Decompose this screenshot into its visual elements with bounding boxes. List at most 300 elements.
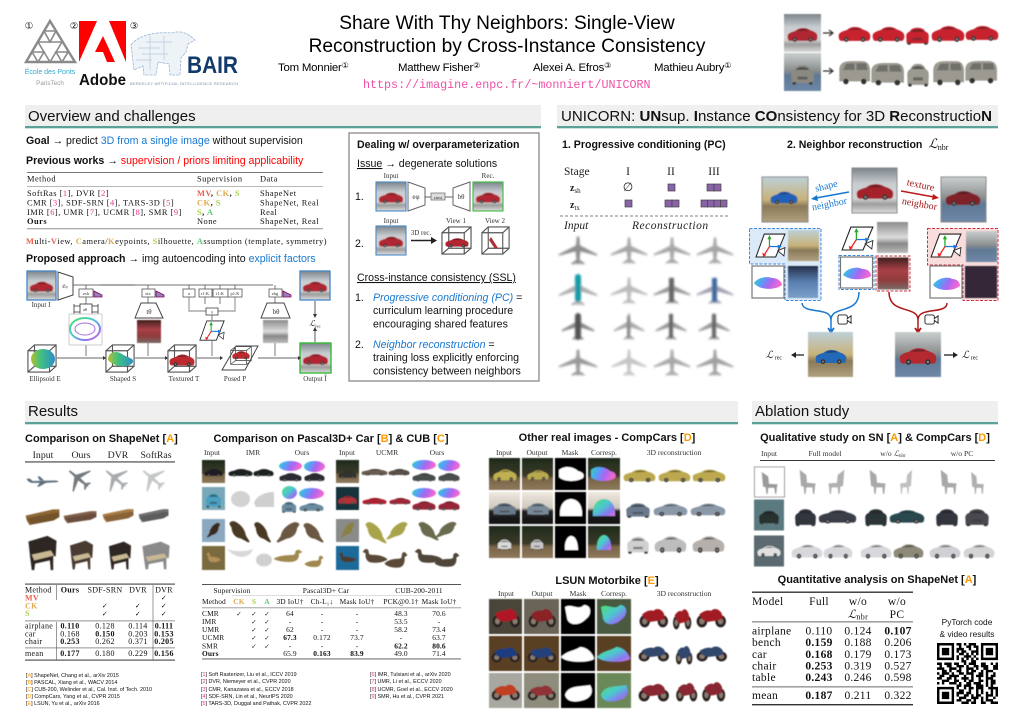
column headers bbox=[204, 448, 444, 457]
ellipsoid stage: Ellipsoid E bbox=[29, 375, 61, 383]
posed stage bbox=[222, 346, 258, 383]
table: quantitative: 0.322 bbox=[884, 690, 912, 702]
table: quantitative: 0.168 bbox=[805, 649, 833, 661]
item: progressive conditioning bbox=[355, 292, 522, 330]
table: Pascal3D and CUB metrics: 70.6 bbox=[432, 609, 446, 618]
table: Pascal3D and CUB metrics: 80.6 bbox=[432, 642, 446, 650]
texture decoder and map bbox=[135, 303, 163, 343]
table: Pascal3D and CUB metrics: ✓ bbox=[264, 610, 270, 618]
stage table: Input bbox=[563, 220, 589, 232]
table: Pascal3D and CUB metrics: 71.4 bbox=[432, 649, 446, 658]
table: ShapeNet metrics: 0.110 bbox=[60, 622, 80, 630]
stage table: z bbox=[570, 200, 574, 211]
table: Pascal3D and CUB metrics: CK bbox=[233, 597, 245, 606]
table: Pascal3D and CUB metrics: UCMR bbox=[202, 633, 224, 642]
table: quantitative: 0.179 bbox=[844, 649, 872, 661]
ellipsoid stage bbox=[28, 345, 61, 383]
logo: Adobe: Adobe bbox=[79, 72, 126, 89]
background decoder and map bbox=[261, 303, 290, 343]
table: quantitative: 0.173 bbox=[884, 649, 912, 661]
table: Pascal3D and CUB metrics: ✓ bbox=[264, 642, 270, 650]
cross-instance heading: Cross-instance consistency (SSL) bbox=[357, 272, 516, 284]
table: Pascal3D and CUB metrics: Method bbox=[202, 597, 226, 606]
table: previous methods: S, A bbox=[197, 208, 213, 217]
logo: Ecole des Ponts: ParisTech bbox=[36, 80, 64, 87]
table: ShapeNet metrics: 0.203 bbox=[128, 630, 148, 638]
subpanel: LSUN motorbike bbox=[489, 575, 727, 708]
table: ShapeNet metrics: mean bbox=[25, 649, 44, 658]
authors: ① bbox=[342, 61, 349, 70]
stage table bbox=[560, 166, 730, 232]
subpanel: Pascal3D and CUB comparison bbox=[201, 433, 461, 707]
latent connections bbox=[73, 285, 275, 356]
table: Pascal3D and CUB metrics: 73.7 bbox=[350, 633, 364, 642]
output images and losses: ℒ bbox=[766, 350, 773, 361]
table: Pascal3D and CUB metrics: - bbox=[438, 617, 441, 626]
subheading: qualitative: Qualitative study on SN [A] & CompCars [D] bbox=[760, 432, 990, 444]
stage table: Stage bbox=[564, 166, 590, 178]
references A-E: [A] ShapeNet, Chang et al., arXiv 2015 bbox=[26, 673, 119, 679]
latent code labels: zsh bbox=[83, 291, 90, 296]
arrows: shape and texture neighbors: texture bbox=[906, 177, 936, 194]
table: Pascal3D and CUB metrics: 73.4 bbox=[432, 625, 446, 634]
column headers: Input bbox=[339, 448, 356, 457]
table: ShapeNet metrics: Ours bbox=[61, 586, 79, 594]
column headers bbox=[496, 448, 702, 457]
subpanel: progressive conditioning bbox=[559, 139, 733, 376]
table: quantitative: ℒ bbox=[848, 609, 857, 621]
issue 1 autoencoder: bθ bbox=[458, 193, 465, 201]
table: quantitative: w/o bbox=[849, 596, 867, 608]
column headers: Mask bbox=[562, 448, 579, 457]
table: quantitative: PC bbox=[890, 609, 904, 621]
column headers: Input bbox=[204, 448, 221, 457]
subheading: Comparison on Pascal3D+ Car [B] & CUB [C] bbox=[213, 433, 449, 445]
latent code labels: π bbox=[211, 310, 214, 314]
references 1-5: [2] DVR, Niemeyer et al., CVPR 2020 bbox=[201, 679, 291, 685]
table: quantitative: 0.124 bbox=[844, 626, 872, 638]
table: Pascal3D and CUB metrics: ✓ bbox=[264, 634, 270, 642]
subpanel: ShapeNet comparison bbox=[25, 433, 178, 707]
latent code labels: zbg bbox=[272, 291, 279, 296]
table: Pascal3D and CUB metrics: - bbox=[321, 642, 324, 650]
table: previous methods: Ours bbox=[27, 217, 47, 226]
table: Pascal3D and CUB metrics: CMR bbox=[202, 609, 219, 618]
references A-E bbox=[26, 673, 152, 707]
left method outputs bbox=[227, 461, 325, 567]
background decoder and map: bθ bbox=[273, 308, 280, 316]
column headers: Ours bbox=[430, 448, 444, 457]
column headers: DVR bbox=[108, 450, 129, 461]
table: Pascal3D and CUB metrics: 62.2 bbox=[394, 642, 408, 650]
latent code labels: aθ bbox=[83, 307, 87, 312]
table: Pascal3D and CUB metrics: - bbox=[356, 609, 359, 618]
issue 1 autoencoder: 1. bbox=[355, 191, 364, 203]
output images and losses: ℒ bbox=[962, 350, 969, 361]
authors: Tom Monnier bbox=[278, 62, 342, 74]
column headers: Full model bbox=[808, 449, 842, 458]
logo: Adobe bbox=[70, 21, 126, 89]
table: quantitative: nbr bbox=[857, 612, 868, 622]
table: Pascal3D and CUB metrics: 0.172 bbox=[313, 633, 331, 642]
table: Pascal3D and CUB metrics: - bbox=[356, 642, 359, 650]
object comparison grid bbox=[26, 461, 171, 570]
column headers: w/o PC bbox=[951, 449, 973, 458]
logo: Ecole des Ponts bbox=[25, 21, 76, 87]
column headers: Ours bbox=[71, 450, 91, 461]
latent code labels bbox=[83, 291, 279, 314]
table: ShapeNet metrics: ✓ bbox=[102, 610, 108, 618]
table: ShapeNet metrics: ✓ bbox=[161, 594, 167, 602]
input image: Input I bbox=[32, 301, 51, 309]
heading: ablation: Ablation study bbox=[755, 403, 850, 420]
logo: BAIR bear: ③ bbox=[130, 21, 139, 32]
logo: BAIR bear: BAIR bbox=[187, 52, 238, 79]
column headers: UCMR bbox=[376, 448, 399, 457]
table: Pascal3D and CUB metrics: ✓ bbox=[251, 642, 257, 650]
panel: overview and challenges bbox=[25, 105, 541, 383]
table: ShapeNet metrics: ✓ bbox=[135, 610, 141, 618]
table: previous methods: ShapeNet bbox=[260, 189, 297, 198]
table: Pascal3D and CUB metrics: 63.7 bbox=[432, 633, 446, 642]
table: Pascal3D and CUB metrics: PCK@0.1† bbox=[383, 597, 419, 606]
input images bbox=[202, 460, 359, 570]
references 1-5: [4] SDF-SRN, Lin et al., NeurIPS 2020 bbox=[201, 694, 293, 700]
latent code labels: ztx bbox=[145, 291, 151, 296]
table: Pascal3D and CUB metrics: IMR bbox=[202, 617, 216, 626]
table: Pascal3D and CUB metrics: ✓ bbox=[236, 610, 242, 618]
authors: ② bbox=[473, 61, 480, 70]
column headers: Ours bbox=[295, 448, 309, 457]
table: ShapeNet metrics: 0.253 bbox=[60, 637, 80, 646]
red neighbor factors bbox=[928, 228, 998, 300]
heading: UNICORN: UNICORN: UNsup. Instance COnsistency for 3D ReconstructioN bbox=[561, 108, 992, 125]
issue 1 autoencoder: zinst bbox=[434, 195, 443, 200]
table: quantitative: Model bbox=[752, 596, 784, 608]
item: progressive conditioning: curriculum learning procedure bbox=[373, 305, 513, 317]
arrows: shape and texture neighbors bbox=[811, 177, 939, 213]
table: Pascal3D and CUB metrics: - bbox=[400, 633, 403, 642]
column headers: Input bbox=[496, 448, 513, 457]
authors: Matthew Fisher bbox=[398, 62, 473, 74]
image grid bbox=[489, 458, 620, 558]
3D reconstruction views bbox=[624, 470, 725, 554]
table: Pascal3D and CUB metrics: 64 bbox=[286, 609, 294, 618]
authors: Alexei A. Efros bbox=[533, 62, 604, 74]
table: Pascal3D and CUB metrics: 67.3 bbox=[283, 633, 297, 642]
input image bbox=[27, 271, 56, 309]
authors: ③ bbox=[604, 61, 611, 70]
table: previous methods: MV, CK, S bbox=[197, 189, 240, 198]
table: ShapeNet metrics: CK bbox=[25, 602, 38, 610]
table: ShapeNet metrics: chair bbox=[25, 637, 43, 646]
table: ShapeNet metrics: 0.229 bbox=[128, 649, 148, 658]
table: quantitative: 0.206 bbox=[884, 637, 912, 649]
heading: Dealing w/ overparameterization bbox=[357, 139, 520, 151]
table: ShapeNet metrics: car bbox=[25, 630, 36, 638]
texture decoder and map: tθ bbox=[146, 308, 152, 316]
table: Pascal3D and CUB metrics: A bbox=[264, 597, 270, 606]
subheading: 1. Progressive conditioning (PC) bbox=[562, 139, 726, 151]
table: Pascal3D and CUB metrics: 0.163 bbox=[313, 649, 331, 658]
table: Pascal3D and CUB metrics: - bbox=[289, 642, 292, 650]
image grid bbox=[489, 599, 631, 708]
table: quantitative: 0.253 bbox=[805, 660, 833, 672]
issue 1 autoencoder: eφ bbox=[412, 193, 420, 201]
table: Pascal3D and CUB metrics: ✓ bbox=[264, 618, 270, 626]
output images and losses: rec bbox=[969, 356, 978, 362]
table: ShapeNet metrics: 0.168 bbox=[60, 630, 80, 638]
subpanel: other real images CompCars bbox=[489, 432, 725, 558]
references A-E: [D] CompCars, Yang et al., CVPR 2015 bbox=[26, 694, 120, 700]
column headers: SoftRas bbox=[140, 450, 172, 461]
table: Pascal3D and CUB metrics: - bbox=[321, 609, 324, 618]
column headers: Input bbox=[33, 450, 54, 461]
table: ShapeNet metrics: ✓ bbox=[135, 602, 141, 610]
table: previous methods: Method bbox=[27, 174, 56, 184]
column headers bbox=[498, 589, 712, 598]
output images and losses bbox=[766, 332, 978, 377]
QR code caption bbox=[940, 617, 994, 639]
3D reconstruction views bbox=[639, 609, 727, 701]
table: quantitative bbox=[752, 592, 913, 705]
textured stage: Textured T bbox=[169, 375, 200, 383]
references 6-9: [6] IMR, Tulsiani et al., arXiv 2020 bbox=[370, 672, 451, 678]
table: ShapeNet metrics: DVR bbox=[129, 586, 147, 594]
table: previous methods: IMR [6], UMR [7], UCMR [8], SMR [9] bbox=[27, 208, 182, 217]
QR code bbox=[937, 643, 998, 704]
teaser: cars rotating views bbox=[784, 14, 998, 91]
table: quantitative: 0.598 bbox=[884, 672, 912, 684]
table: Pascal3D and CUB metrics: ✓ bbox=[251, 626, 257, 634]
issue 2 3D reconstruction: 3D rec. bbox=[411, 229, 432, 237]
table: ShapeNet metrics: SDF-SRN bbox=[87, 586, 123, 594]
table: ShapeNet metrics bbox=[25, 584, 175, 661]
table: ShapeNet metrics: ✓ bbox=[161, 602, 167, 610]
table: Pascal3D and CUB metrics: - bbox=[321, 617, 324, 626]
authors: Mathieu Aubry bbox=[654, 62, 724, 74]
table: ShapeNet metrics: DVR bbox=[155, 586, 173, 594]
table: Pascal3D and CUB metrics: SMR bbox=[202, 642, 218, 650]
right method outputs bbox=[362, 460, 460, 568]
table: ShapeNet metrics: 0.150 bbox=[95, 630, 115, 638]
subheading: 2. Neighbor reconstruction ℒ bbox=[787, 136, 938, 151]
table: Pascal3D and CUB metrics bbox=[202, 584, 461, 659]
item: progressive conditioning: encouraging shared features bbox=[373, 318, 508, 330]
column headers: 3D reconstruction bbox=[647, 448, 702, 457]
table: ShapeNet metrics: Method bbox=[25, 586, 52, 594]
issue 2 3D reconstruction: Input bbox=[384, 217, 398, 225]
column headers: IMR bbox=[246, 448, 261, 457]
logo: Adobe: ② bbox=[70, 21, 79, 32]
logo: Ecole des Ponts: École des Ponts bbox=[25, 67, 76, 76]
table: quantitative: 0.319 bbox=[844, 660, 872, 672]
latent code labels: t1:K bbox=[216, 291, 225, 296]
table: Pascal3D and CUB metrics: 53.5 bbox=[394, 617, 408, 626]
references 1-5: [1] Soft Rasterizer, Liu et al., ICCV 2019 bbox=[201, 672, 297, 678]
issue 1 autoencoder bbox=[355, 172, 503, 211]
item: neighbor reconstruction: consistency between neighbors bbox=[373, 366, 521, 378]
table: Pascal3D and CUB metrics: ✓ bbox=[251, 610, 257, 618]
heading: ablation bbox=[752, 401, 998, 424]
column headers: Input bbox=[761, 449, 778, 458]
table: ShapeNet metrics: 0.156 bbox=[154, 649, 174, 658]
table: ShapeNet metrics: 0.111 bbox=[155, 622, 173, 630]
table: Pascal3D and CUB metrics: S bbox=[252, 597, 256, 606]
table: ShapeNet metrics: 0.128 bbox=[95, 622, 115, 630]
stage table: III bbox=[708, 166, 720, 178]
references 1-5: [3] CMR, Kanazawa et al., ECCV 2018 bbox=[201, 687, 294, 693]
text: previous works: Previous works → supervision / priors limiting applicability bbox=[26, 155, 304, 167]
stage table: sh bbox=[574, 187, 581, 195]
table: previous methods: None bbox=[197, 217, 217, 226]
table: Pascal3D and CUB metrics: - bbox=[289, 617, 292, 626]
output images: Output Î bbox=[303, 375, 327, 383]
table: Pascal3D and CUB metrics: Mask IoU† bbox=[340, 597, 375, 606]
stage table: I bbox=[626, 166, 630, 178]
authors bbox=[278, 61, 731, 74]
column headers: w/o ℒ bbox=[880, 449, 899, 458]
column headers bbox=[25, 450, 175, 462]
issue 1 autoencoder: Rec. bbox=[482, 172, 495, 180]
table: Pascal3D and CUB metrics: Ch-L₁↓ bbox=[311, 597, 333, 606]
table: Pascal3D and CUB metrics: 65.9 bbox=[283, 649, 297, 658]
table: Pascal3D and CUB metrics: - bbox=[356, 625, 359, 634]
table: quantitative: 0.243 bbox=[805, 672, 833, 684]
table: previous methods: ShapeNet, Real bbox=[260, 198, 319, 208]
issue 2 3D reconstruction bbox=[355, 217, 509, 255]
legend: supervision types: Multi-View, Camera/Keypoints, Silhouette, Assumption (template, symmetry) bbox=[26, 237, 327, 246]
table: quantitative: w/o bbox=[888, 596, 906, 608]
pipeline arrows bbox=[57, 301, 317, 360]
table: previous methods: Real bbox=[260, 208, 278, 217]
references 6-9: [7] UMR, Li et al., ECCV 2020 bbox=[370, 679, 442, 685]
issue heading: Issue → degenerate solutions bbox=[357, 158, 497, 170]
issue 2 3D reconstruction: 2. bbox=[355, 238, 364, 250]
references 6-9 bbox=[370, 672, 453, 700]
table: quantitative: airplane bbox=[752, 626, 791, 638]
column headers: Input bbox=[498, 589, 515, 598]
shaped stage: Shaped S bbox=[110, 375, 136, 383]
table: Pascal3D and CUB metrics: - bbox=[321, 625, 324, 634]
text: goal: Goal → predict 3D from a single image without supervision bbox=[26, 135, 303, 147]
table: Pascal3D and CUB metrics: ✓ bbox=[251, 618, 257, 626]
table: Pascal3D and CUB metrics: Pascal3D+ Car bbox=[303, 586, 350, 595]
column headers: nbr bbox=[899, 454, 906, 459]
column headers: Mask bbox=[570, 589, 587, 598]
table: previous methods: CK, S bbox=[197, 198, 221, 208]
panel: UNICORN bbox=[557, 105, 998, 377]
table: quantitative: mean bbox=[752, 690, 778, 702]
logo: BAIR bear: BERKELEY ARTIFICIAL INTELLIGENCE RESEARCH bbox=[130, 81, 238, 86]
item: neighbor reconstruction: 2. bbox=[355, 339, 364, 351]
column headers: Corresp. bbox=[591, 448, 617, 457]
table: quantitative: 0.188 bbox=[844, 637, 872, 649]
column headers: Output bbox=[526, 448, 548, 457]
logo: Ecole des Ponts: ① bbox=[25, 21, 34, 32]
stage table: ∅ bbox=[623, 180, 633, 194]
table: previous methods: CMR [3], SDF-SRN [4], TARS-3D [5] bbox=[27, 198, 174, 208]
table: quantitative: 0.527 bbox=[884, 660, 912, 672]
table: ShapeNet metrics: 0.262 bbox=[95, 637, 115, 646]
subpanel: neighbor reconstruction bbox=[750, 136, 998, 377]
item: neighbor reconstruction bbox=[355, 339, 521, 378]
column headers: 3D reconstruction bbox=[657, 589, 712, 598]
encoder: eφ bbox=[62, 282, 68, 290]
encoder bbox=[58, 272, 73, 300]
title: Reconstruction by Cross-Instance Consistency bbox=[309, 36, 706, 57]
column headers: Output bbox=[531, 589, 553, 598]
stage table: Reconstruction bbox=[631, 220, 709, 232]
stage table: tx bbox=[574, 204, 580, 212]
diagram: autoencoding pipeline bbox=[27, 271, 331, 383]
table: ShapeNet metrics: S bbox=[25, 609, 30, 618]
stage table: z bbox=[570, 183, 574, 194]
table: quantitative: table bbox=[752, 672, 776, 684]
panel: ablation study bbox=[752, 401, 998, 705]
table: quantitative: 0.107 bbox=[884, 626, 912, 638]
table: ShapeNet metrics: 0.114 bbox=[128, 622, 148, 630]
table: Pascal3D and CUB metrics: ✓ bbox=[264, 626, 270, 634]
pose projection box and panel bbox=[200, 308, 224, 340]
references A-E: [B] PASCAL, Xiang et al., WACV 2014 bbox=[26, 680, 117, 686]
issue 2 3D reconstruction: View 1 bbox=[446, 217, 466, 225]
table: Pascal3D and CUB metrics: Supervision bbox=[214, 586, 251, 595]
table: ShapeNet metrics: 0.371 bbox=[128, 637, 148, 646]
table: Pascal3D and CUB metrics: CUB-200-2011 bbox=[395, 586, 443, 595]
table: quantitative: 0.211 bbox=[845, 690, 871, 702]
issue 2 3D reconstruction: View 2 bbox=[485, 217, 505, 225]
logo: BAIR bear bbox=[130, 21, 238, 86]
table: Pascal3D and CUB metrics: Ours bbox=[202, 649, 219, 658]
qualitative grid bbox=[754, 467, 994, 566]
table: ShapeNet metrics: ✓ bbox=[102, 602, 108, 610]
title bbox=[309, 13, 706, 57]
references A-E: [E] LSUN, Yu et al., arXiv 2016 bbox=[26, 701, 100, 707]
loss label: rec bbox=[315, 324, 321, 328]
table: Pascal3D and CUB metrics: 48.3 bbox=[394, 609, 408, 618]
table: Pascal3D and CUB metrics: UMR bbox=[202, 625, 219, 634]
table: previous methods: ShapeNet, Real bbox=[260, 217, 319, 226]
item: progressive conditioning: 1. bbox=[355, 292, 364, 304]
source images bbox=[762, 168, 986, 222]
item: progressive conditioning: Progressive conditioning (PC) = bbox=[373, 292, 522, 304]
heading: results bbox=[25, 401, 738, 424]
heading: overview bbox=[25, 105, 541, 128]
heading: overview: Overview and challenges bbox=[28, 108, 196, 125]
subheading: Other real images - CompCars [D] bbox=[519, 432, 696, 444]
loss label: ℒ bbox=[309, 319, 315, 328]
references A-E: [C] CUB-200, Welinder et al., Cal. Inst. of Tech. 2010 bbox=[26, 687, 152, 693]
table: quantitative: bench bbox=[752, 637, 781, 649]
subheading: LSUN Motorbike [E] bbox=[555, 575, 659, 587]
title: Share With Thy Neighbors: Single-View bbox=[339, 13, 675, 34]
text: proposed approach: Proposed approach → img autoencoding into explicit factors bbox=[26, 253, 316, 265]
table: ShapeNet metrics: 0.153 bbox=[154, 630, 174, 638]
references 6-9: [8] UCMR, Goel et al., ECCV 2020 bbox=[370, 687, 453, 693]
arrows: shape and texture neighbors: neighbor bbox=[901, 196, 939, 213]
heading: results: Results bbox=[28, 403, 78, 420]
output images and losses: rec bbox=[773, 356, 782, 362]
table: Pascal3D and CUB metrics: ✓ bbox=[251, 634, 257, 642]
table: quantitative: car bbox=[752, 649, 767, 661]
latent code labels: p1:K bbox=[230, 291, 240, 296]
item: neighbor reconstruction: training loss explicitly enforcing bbox=[373, 352, 519, 364]
subheading: Comparison on ShapeNet [A] bbox=[25, 433, 178, 445]
output images bbox=[300, 271, 331, 383]
panel: dealing with overparameterization bbox=[349, 133, 539, 381]
table: Pascal3D and CUB metrics: 49.0 bbox=[394, 649, 408, 658]
